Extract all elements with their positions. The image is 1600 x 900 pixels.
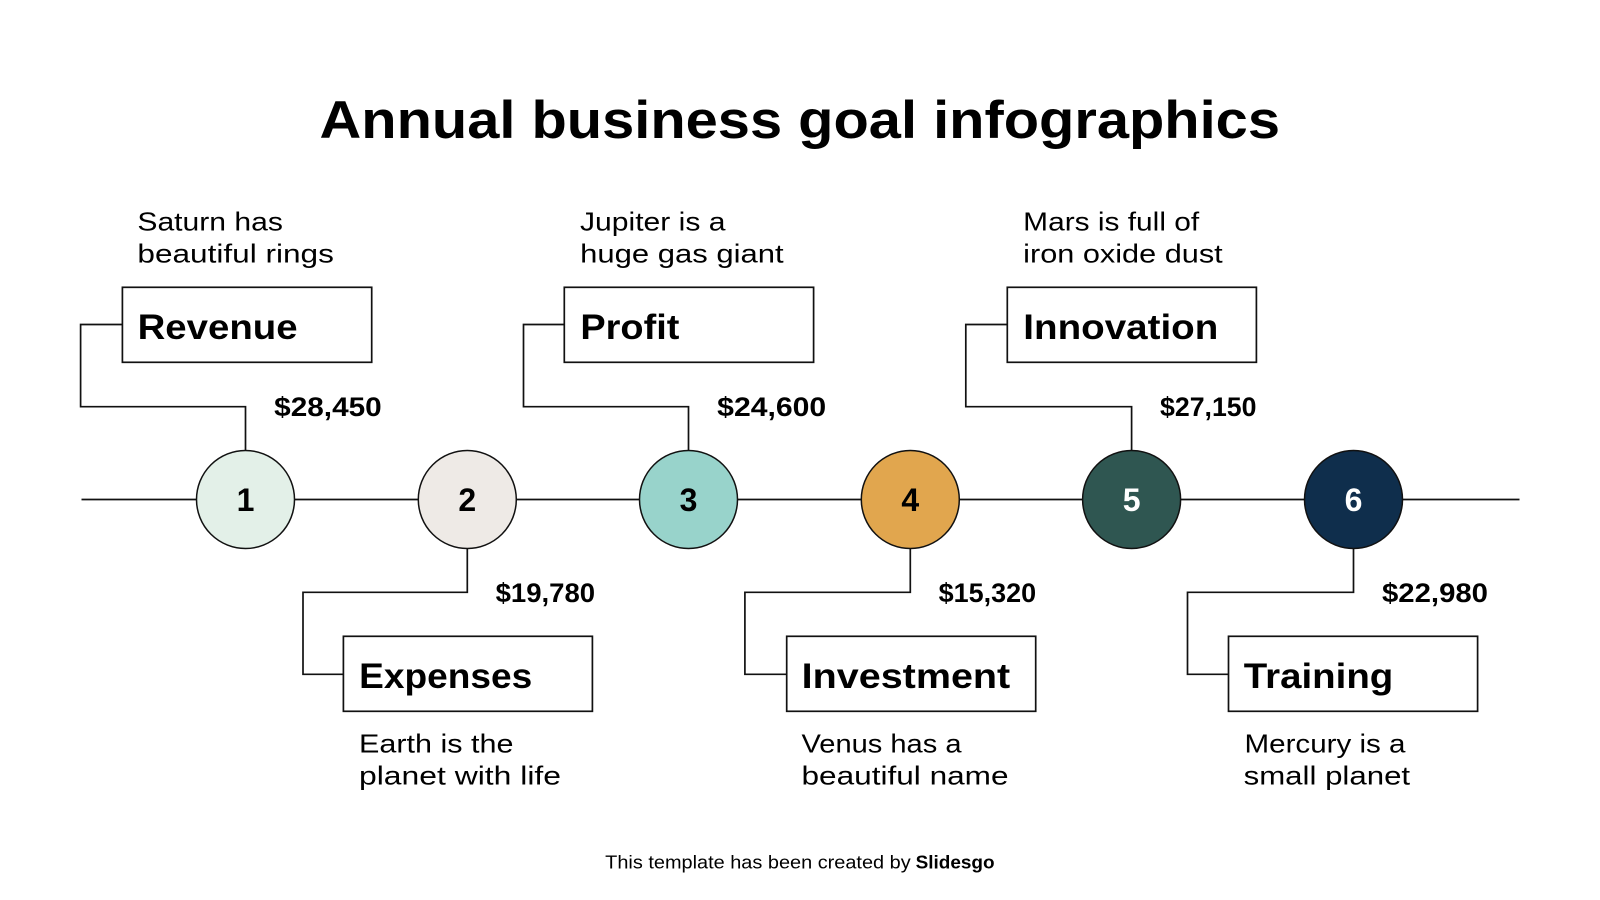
value 2: $19,780: [496, 578, 595, 608]
description 6: small planet: [1244, 760, 1411, 790]
connector 4: [745, 549, 910, 674]
description 5: [1023, 207, 1224, 268]
description 4: beautiful name: [802, 760, 1008, 790]
label box: Revenue: [122, 287, 372, 362]
node 6: 6: [1345, 482, 1362, 518]
value 6: $22,980: [1382, 578, 1488, 608]
description 3: huge gas giant: [580, 238, 785, 268]
step 3: profit: [524, 207, 826, 548]
node 1: 1: [237, 482, 254, 518]
label box: Innovation: Innovation: [1023, 308, 1218, 347]
step 5: innovation: [966, 207, 1256, 548]
description 1: [137, 207, 334, 268]
description 6: Mercury is a: [1244, 729, 1406, 759]
label box: Investment: Investment: [802, 657, 1011, 696]
node 1: [196, 450, 294, 548]
node 2: [418, 450, 516, 548]
node 3: 3: [680, 482, 697, 518]
step 4: investment: [745, 450, 1036, 790]
step 6: training: [1188, 450, 1488, 790]
step 2: expenses: [303, 450, 595, 790]
node 4: 4: [901, 482, 919, 518]
connector 6: [1188, 549, 1354, 674]
value 3: $24,600: [717, 392, 826, 422]
description 1: beautiful rings: [137, 238, 334, 268]
label box: Expenses: Expenses: [359, 657, 532, 696]
value 1: $28,450: [274, 392, 382, 422]
timeline line: [82, 498, 1520, 500]
node 5: 5: [1123, 482, 1140, 518]
description 5: iron oxide dust: [1023, 238, 1224, 268]
connector 2: [303, 549, 467, 674]
label box: Training: Training: [1244, 657, 1393, 696]
node 2: 2: [458, 482, 476, 518]
description 3: Jupiter is a: [580, 207, 726, 237]
description 5: Mars is full of: [1023, 207, 1200, 237]
node 6: [1304, 450, 1402, 548]
label box: Profit: Profit: [580, 308, 680, 347]
label box: Profit: [564, 287, 814, 362]
label box: Expenses: [343, 636, 592, 711]
connector 5: [966, 324, 1132, 450]
footer credit: Slidesgo: [916, 852, 995, 872]
node 5: [1083, 450, 1181, 548]
step 1: revenue: [81, 207, 382, 548]
description 4: Venus has a: [802, 729, 962, 759]
description 2: [359, 729, 561, 790]
node 3: [640, 450, 738, 548]
label box: Revenue: Revenue: [138, 308, 298, 347]
label box: Investment: [787, 636, 1036, 711]
description 6: [1244, 729, 1411, 790]
connector 1: [81, 324, 245, 450]
connector 3: [524, 324, 688, 450]
description 2: Earth is the: [359, 729, 514, 759]
footer credit: This template has been created by: [605, 852, 911, 872]
title: Annual business goal infographics: [320, 91, 1280, 150]
label box: Training: [1228, 636, 1478, 711]
description 4: [802, 729, 1008, 790]
label box: Innovation: [1007, 287, 1256, 362]
value 4: $15,320: [939, 578, 1036, 608]
description 1: Saturn has: [137, 207, 283, 237]
node 4: [861, 450, 959, 548]
description 3: [580, 207, 785, 268]
description 2: planet with life: [359, 760, 561, 790]
value 5: $27,150: [1160, 392, 1256, 422]
